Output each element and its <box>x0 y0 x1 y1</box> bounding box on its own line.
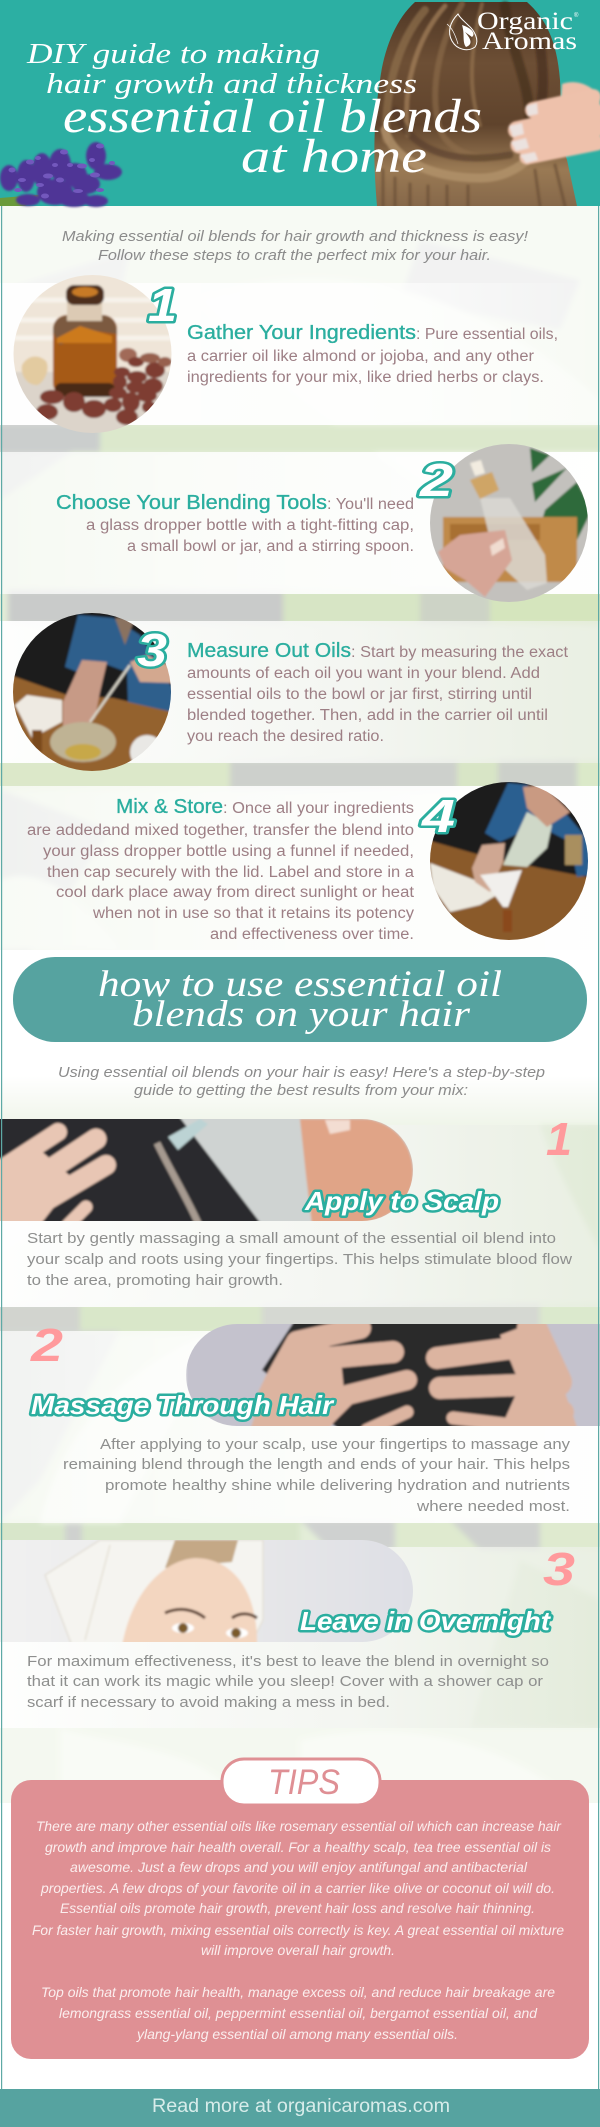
step 1 text: : Pure essential oils, <box>416 326 558 343</box>
section heading pill: how to use: how to use essential oil <box>98 964 502 1005</box>
tips text: will improve overall hair growth. <box>201 1942 395 1958</box>
body text: Start by gently massaging a small amount of the essential oil blend into <box>27 1230 556 1247</box>
step 2 text <box>56 492 414 555</box>
heading: Massage Through Hair: Massage Through Hair <box>31 1390 335 1420</box>
tips label pill: TIPS <box>268 1763 340 1802</box>
band: step 2 <box>0 452 600 594</box>
step 1 text: ingredients for your mix, like dried herbs or clays. <box>187 369 544 386</box>
tips text: awesome. Just a few drops and you will enjoy antifungal and antibacterial <box>70 1859 528 1875</box>
title text: essential oil blends <box>63 90 482 143</box>
tips text: growth and improve hair health overall. For a healthy scalp, tea tree essential oil is <box>45 1839 551 1855</box>
photo: oil dropped on scalp <box>0 1115 420 1225</box>
hand <box>509 82 600 163</box>
heading: Apply to Scalp: Apply to Scalp <box>304 1186 499 1216</box>
body text <box>27 1653 549 1711</box>
footer: Read more at organicaromas.com <box>152 2096 450 2117</box>
step 3 text <box>187 640 569 745</box>
how-to step 1: apply to scalp <box>0 1113 572 1289</box>
how-to step 3: leave in overnight <box>0 1536 576 1711</box>
step 4 text: then cap securely with the lid. Label and store in a <box>47 864 414 881</box>
photo: measuring oil with a pipette <box>13 613 171 771</box>
band: how-to step 3 <box>0 1547 600 1728</box>
logo: Organic Aromas: Aromas <box>482 28 577 55</box>
number 1 pink: 1 <box>546 1113 572 1165</box>
body text <box>27 1230 572 1289</box>
logo: Organic Aromas: ® <box>574 12 579 19</box>
heading: Leave in Overnight: Leave in Overnight <box>300 1606 551 1636</box>
intro text: Follow these steps to craft the perfect mix for your hair. <box>98 247 491 264</box>
how-to intro text: guide to getting the best results from your mix: <box>134 1082 468 1099</box>
tips text: lemongrass essential oil, peppermint essential oil, bergamot essential oil, and <box>59 2005 538 2021</box>
logo: Organic Aromas <box>447 8 579 55</box>
tips text <box>32 1818 564 2042</box>
how-to intro text: Using essential oil blends on your hair is easy! Here's a step-by-step <box>58 1064 545 1081</box>
number 2 pink: 2 <box>30 1319 64 1371</box>
title text: at home <box>241 130 427 183</box>
photo: dropper bottle on wooden tray <box>427 441 592 606</box>
section heading pill: how to use <box>13 957 587 1042</box>
step 3 text: Measure Out Oils <box>187 640 351 662</box>
step 4 text: cool dark place away from direct sunlight or heat <box>56 884 415 901</box>
step 1: gather your ingredients <box>10 272 558 438</box>
step 4 text <box>27 796 415 943</box>
step 4 text: your glass dropper bottle using a funnel if needed, <box>43 843 414 860</box>
title text <box>26 38 482 183</box>
band: step 3 <box>0 621 600 763</box>
body text: After applying to your scalp, use your fingertips to massage any <box>100 1436 571 1453</box>
tips text: ylang-ylang essential oil among many essential oils. <box>136 2026 458 2042</box>
tips label pill <box>222 1759 380 1805</box>
step 2 text: : You'll need <box>327 496 414 513</box>
photo: hair and hand <box>374 2 600 206</box>
step 3 text: amounts of each oil you want in your blend. Add <box>187 665 540 682</box>
number 2: 2 <box>419 454 454 506</box>
step 4 text: : Once all your ingredients <box>223 800 414 817</box>
step 2 text: a glass dropper bottle with a tight-fitting cap, <box>86 517 414 534</box>
step 3 text: blended together. Then, add in the carrier oil until <box>187 707 548 724</box>
section heading pill: how to use: blends on your hair <box>132 994 471 1035</box>
step 4: mix and store <box>27 779 592 944</box>
panel: tips <box>11 1759 589 2059</box>
step 3 text: essential oils to the bowl or jar first, stirring until <box>187 686 532 703</box>
photo: woman with towel on hair <box>0 1536 420 1646</box>
band: how-to section backdrop <box>0 950 600 1125</box>
title text: DIY guide to making <box>26 38 320 70</box>
number 4: 4 <box>421 790 455 842</box>
step 4 text: are addedand mixed together, transfer the blend into <box>27 822 414 839</box>
tips text: Essential oils promote hair growth, prevent hair loss and resolve hair thinning. <box>60 1900 535 1916</box>
band: how-to step 2 <box>0 1331 600 1523</box>
tips text: properties. A few drops of your favorite oil in a carrier like olive or coconut oil will do. <box>40 1880 555 1896</box>
band: lower white area <box>0 1803 600 2089</box>
band: step 4 <box>0 786 600 956</box>
step 1 text <box>187 322 558 386</box>
intro text <box>62 228 529 264</box>
band: tips backdrop <box>0 1728 600 1803</box>
how-to intro text <box>58 1064 545 1099</box>
photo: pouring blend through a funnel <box>427 779 592 944</box>
photo: oil bottle and jojoba seeds <box>10 272 176 438</box>
step 4 text: and effectiveness over time. <box>210 926 414 943</box>
step 4 text: when not in use so that it retains its potency <box>92 905 414 922</box>
step 3: measure out oils <box>10 610 569 778</box>
number 3: 3 <box>137 624 167 676</box>
number 3 pink: 3 <box>543 1543 576 1595</box>
lavender <box>0 142 122 207</box>
step 2 text: a small bowl or jar, and a stirring spoon. <box>127 538 414 555</box>
logo: Organic Aromas: Organic <box>477 8 573 35</box>
step 3 text: you reach the desired ratio. <box>187 728 384 745</box>
tips text: For faster hair growth, mixing essential oils correctly is key. A great essential oil mixture <box>32 1922 564 1938</box>
body text: For maximum effectiveness, it's best to leave the blend in overnight so <box>27 1653 549 1670</box>
step 4 text: Mix & Store <box>116 796 223 818</box>
tips text: There are many other essential oils like rosemary essential oil which can increase hair <box>36 1818 562 1834</box>
body text: your scalp and roots using your fingertips. This helps stimulate blood flow <box>27 1251 572 1268</box>
body text <box>63 1436 571 1515</box>
footer <box>0 2089 600 2127</box>
band: how-to step 1 <box>0 1125 600 1307</box>
band: step 1 <box>0 283 600 425</box>
body text: remaining blend through the length and ends of your hair. This helps <box>63 1456 570 1473</box>
header banner <box>0 0 600 207</box>
body text: to the area, promoting hair growth. <box>27 1272 283 1289</box>
step 1 text: a carrier oil like almond or jojoba, and any other <box>187 348 534 365</box>
body text: scarf if necessary to avoid making a mess in bed. <box>27 1694 390 1711</box>
step 1 text: Gather Your Ingredients <box>187 322 416 344</box>
photo: hands massaging hair <box>186 1324 600 1426</box>
tips text: Top oils that promote hair health, manage excess oil, and reduce hair breakage are <box>41 1984 555 2000</box>
intro text: Making essential oil blends for hair growth and thickness is easy! <box>62 228 529 245</box>
number 1: 1 <box>148 279 177 331</box>
body text: promote healthy shine while delivering hydration and nutrients <box>105 1477 570 1494</box>
band: intro backdrop <box>0 206 600 283</box>
how-to step 2: massage through hair <box>30 1319 600 1515</box>
step 2 text: Choose Your Blending Tools <box>56 492 327 514</box>
body text: where needed most. <box>416 1498 570 1515</box>
step 2: choose your blending tools <box>56 441 592 606</box>
body text: that it can work its magic while you sleep! Cover with a shower cap or <box>27 1673 543 1690</box>
step 3 text: : Start by measuring the exact <box>351 644 569 661</box>
title text: hair growth and thickness <box>46 68 417 100</box>
